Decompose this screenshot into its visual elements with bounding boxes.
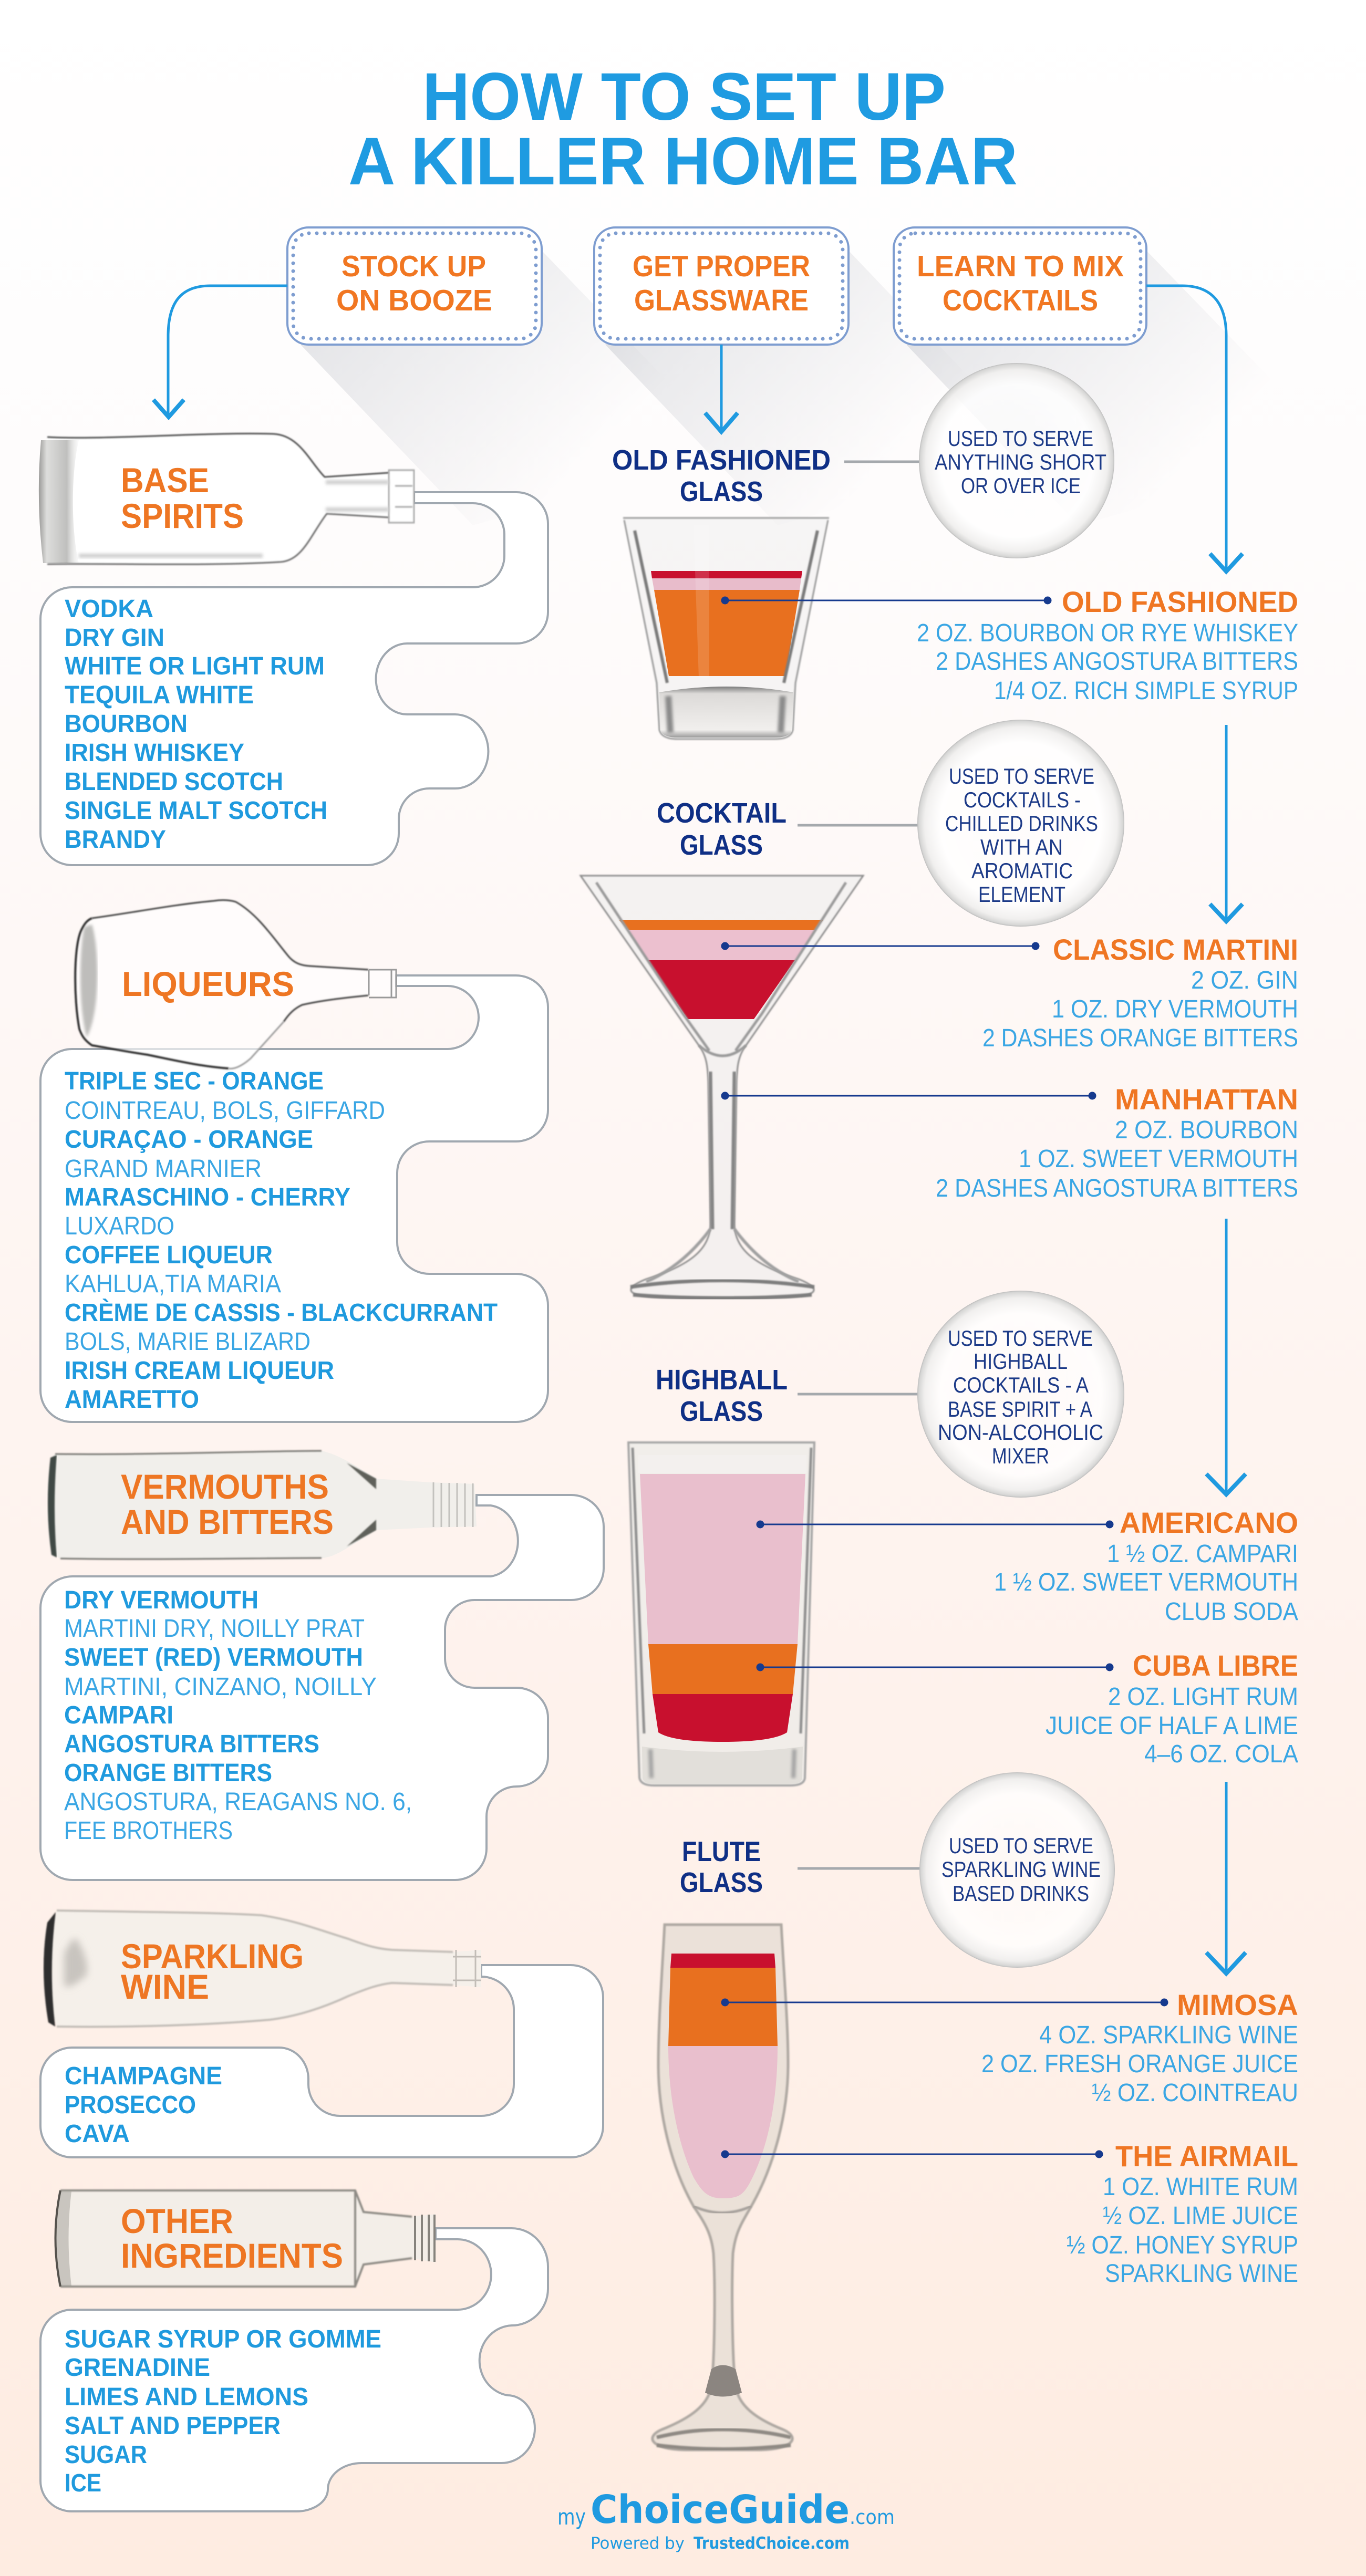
glass: flute	[653, 1925, 792, 2450]
heading: LIQUEURS	[122, 964, 294, 1003]
step box: learn to mix cocktails: LEARN TO MIX	[917, 250, 1124, 283]
recipe: the airmail: THE AIRMAIL	[1115, 2139, 1298, 2173]
heading: flute glass	[680, 1836, 763, 1898]
bubble: old fashioned usage: ANYTHING SHORT	[935, 450, 1106, 474]
logo: myChoiceGuide.com: Powered by	[591, 2534, 685, 2553]
heading: OTHER	[121, 2201, 233, 2240]
heading: highball glass	[656, 1364, 788, 1427]
heading	[121, 461, 244, 535]
list: ANGOSTURA, REAGANS NO. 6,	[64, 1788, 412, 1816]
bubble: highball usage: NON-ALCOHOLIC	[938, 1420, 1103, 1445]
step box: stock up on booze: STOCK UP	[341, 250, 486, 283]
bubble: highball usage: BASE SPIRIT + A	[948, 1397, 1092, 1421]
recipe: americano: CLUB SODA	[1165, 1598, 1298, 1626]
bubble: highball usage: USED TO SERVE	[948, 1326, 1093, 1351]
heading: BASE	[121, 461, 209, 500]
recipe: mimosa: 2 OZ. FRESH ORANGE JUICE	[981, 2050, 1298, 2078]
step box: stock up on booze	[287, 227, 542, 345]
bubble: flute usage: SPARKLING WINE	[941, 1857, 1101, 1882]
heading: VERMOUTHS	[121, 1467, 329, 1506]
bubble: old fashioned usage: USED TO SERVE	[948, 426, 1093, 451]
recipe: cuba libre: JUICE OF HALF A LIME	[1046, 1712, 1298, 1740]
logo: myChoiceGuide.com: .com	[850, 2506, 895, 2529]
connector: old fashioned label to bubble	[844, 460, 920, 463]
recipe: manhattan: 1 OZ. SWEET VERMOUTH	[1019, 1145, 1298, 1173]
ribbon outline	[40, 492, 548, 865]
step box: stock up on booze: ON BOOZE	[336, 284, 492, 317]
list: DRY GIN	[65, 624, 164, 652]
recipe: mimosa: ½ OZ. COINTREAU	[1092, 2079, 1298, 2107]
heading: AND BITTERS	[121, 1502, 334, 1541]
recipe: cuba libre: 2 OZ. LIGHT RUM	[1108, 1683, 1298, 1711]
connector: highball label to bubble	[798, 1393, 919, 1395]
panel: base spirits	[39, 433, 548, 865]
recipe: classic martini: 2 OZ. GIN	[1191, 967, 1298, 994]
bubble: highball usage	[917, 1291, 1124, 1498]
list: BOLS, MARIE BLIZARD	[65, 1328, 311, 1356]
diagonal box shadows	[301, 251, 1341, 525]
list	[64, 1586, 412, 1845]
recipe: the airmail: 1 OZ. WHITE RUM	[1103, 2173, 1298, 2201]
list: CAMPARI	[64, 1701, 173, 1729]
bubble: flute usage	[919, 1772, 1115, 1968]
leader: americano	[757, 1521, 1113, 1528]
heading: cocktail glass	[657, 797, 787, 861]
list: TRIPLE SEC - ORANGE	[65, 1067, 324, 1095]
step box: get proper glassware: GLASSWARE	[634, 284, 809, 317]
list: MARTINI, CINZANO, NOILLY	[64, 1673, 377, 1701]
leader: cuba libre	[757, 1664, 1113, 1671]
heading: old fashioned glass	[612, 444, 831, 507]
recipe: old fashioned: OLD FASHIONED	[1062, 585, 1298, 618]
connector: cocktail label to bubble	[798, 824, 919, 827]
list: COFFEE LIQUEUR	[65, 1241, 273, 1269]
bottle: liqueurs	[75, 900, 396, 1068]
list: FEE BROTHERS	[64, 1817, 233, 1845]
arrow: manhattan to americano	[1206, 1219, 1246, 1494]
bubble: old fashioned usage: OR OVER ICE	[961, 473, 1081, 498]
list: CRÈME DE CASSIS - BLACKCURRANT	[65, 1299, 498, 1327]
list: DRY VERMOUTH	[64, 1586, 258, 1614]
list: COINTREAU, BOLS, GIFFARD	[65, 1097, 385, 1125]
bubble: highball usage: MIXER	[992, 1443, 1049, 1468]
recipe: the airmail: SPARKLING WINE	[1105, 2260, 1298, 2288]
ribbon outline	[40, 2228, 548, 2511]
list: MARTINI DRY, NOILLY PRAT	[64, 1615, 365, 1643]
bubble: old fashioned usage	[919, 363, 1114, 558]
leader: mimosa	[721, 1999, 1168, 2006]
glass: highball	[628, 1442, 814, 1785]
list: SUGAR SYRUP OR GOMME	[65, 2325, 381, 2353]
bubble: cocktail usage: USED TO SERVE	[949, 764, 1094, 788]
ribbon outline	[40, 1495, 604, 1880]
bubble: cocktail usage: CHILLED DRINKS	[945, 811, 1098, 836]
bubble: cocktail usage: WITH AN	[980, 835, 1063, 859]
layered liquid	[668, 1954, 778, 2198]
list: SUGAR	[65, 2441, 147, 2469]
list: IRISH WHISKEY	[65, 739, 244, 767]
bottle: vermouth	[48, 1451, 477, 1559]
list: VODKA	[65, 595, 153, 623]
list: ICE	[65, 2469, 101, 2497]
recipe: mimosa	[981, 1988, 1298, 2107]
list: CAVA	[65, 2120, 130, 2148]
logo: myChoiceGuide.com: TrustedChoice.com	[694, 2534, 850, 2553]
recipe: americano: 1 ½ OZ. CAMPARI	[1107, 1540, 1298, 1568]
recipe: mimosa: 4 OZ. SPARKLING WINE	[1039, 2021, 1298, 2049]
heading: old fashioned glass: GLASS	[680, 476, 763, 507]
heading: flute glass: GLASS	[680, 1867, 763, 1898]
heading: WINE	[121, 1967, 209, 2006]
recipe: manhattan	[936, 1083, 1298, 1202]
heading: flute glass: FLUTE	[682, 1836, 761, 1867]
list: LUXARDO	[65, 1212, 174, 1240]
arrow: booze to base spirits	[153, 286, 287, 417]
layered liquid	[640, 1474, 805, 1742]
list	[65, 1067, 498, 1414]
step box: get proper glassware: GET PROPER	[633, 250, 810, 283]
panel: sparkling wine	[40, 1910, 603, 2157]
list: BOURBON	[65, 710, 188, 738]
bottle: other ingredients	[55, 2190, 436, 2287]
heading: old fashioned glass: OLD FASHIONED	[612, 444, 831, 476]
bubble: cocktail usage: AROMATIC	[971, 858, 1073, 883]
heading: cocktail glass: COCKTAIL	[657, 797, 787, 829]
list: KAHLUA,TIA MARIA	[65, 1270, 281, 1298]
list: MARASCHINO - CHERRY	[65, 1183, 350, 1211]
recipe: classic martini	[982, 933, 1298, 1052]
recipe: americano: AMERICANO	[1120, 1506, 1298, 1539]
list: IRISH CREAM LIQUEUR	[65, 1357, 334, 1385]
list	[65, 595, 327, 854]
list	[65, 2062, 222, 2148]
heading: highball glass: GLASS	[680, 1396, 763, 1427]
heading: SPIRITS	[121, 496, 244, 535]
recipe: old fashioned: 1/4 OZ. RICH SIMPLE SYRUP	[994, 677, 1298, 705]
bubble: highball usage: COCKTAILS - A	[953, 1373, 1089, 1397]
glass: old fashioned	[623, 518, 829, 739]
arrow: glassware to old fashioned glass	[705, 345, 738, 432]
title: HOW TO SET UP	[422, 59, 946, 134]
step box: learn to mix cocktails	[894, 227, 1146, 345]
list: LIMES AND LEMONS	[65, 2383, 308, 2411]
list: AMARETTO	[65, 1386, 199, 1414]
bubble: cocktail usage: ELEMENT	[978, 882, 1065, 907]
bubble: cocktail usage: COCKTAILS -	[964, 787, 1081, 812]
recipe: manhattan: 2 OZ. BOURBON	[1115, 1116, 1298, 1144]
recipe: the airmail	[1067, 2139, 1298, 2288]
title: A KILLER HOME BAR	[348, 124, 1018, 199]
recipe: manhattan: 2 DASHES ANGOSTURA BITTERS	[936, 1175, 1298, 1202]
recipe: old fashioned	[917, 585, 1298, 705]
panel: vermouths and bitters	[40, 1451, 604, 1880]
list: SWEET (RED) VERMOUTH	[64, 1644, 363, 1671]
logo: myChoiceGuide.com: ChoiceGuide	[591, 2487, 850, 2532]
bubble: highball usage: HIGHBALL	[974, 1349, 1068, 1374]
logo: myChoiceGuide.com	[557, 2487, 895, 2553]
recipe: americano	[994, 1506, 1298, 1626]
glass: cocktail	[581, 876, 863, 1299]
recipe: the airmail: ½ OZ. LIME JUICE	[1103, 2202, 1298, 2230]
leader: old fashioned	[721, 597, 1051, 604]
recipe: classic martini: 2 DASHES ORANGE BITTERS	[982, 1024, 1298, 1052]
list: PROSECCO	[65, 2091, 196, 2119]
list: CHAMPAGNE	[65, 2062, 222, 2090]
step box: get proper glassware	[594, 227, 848, 345]
arrow: old fashioned to classic martini	[1210, 725, 1243, 921]
list: BLENDED SCOTCH	[65, 768, 283, 796]
leader: classic martini	[721, 942, 1039, 950]
bubble: flute usage: BASED DRINKS	[953, 1881, 1089, 1906]
heading	[121, 1937, 304, 2006]
list: TEQUILA WHITE	[65, 681, 254, 709]
leader: manhattan	[721, 1092, 1096, 1099]
heading: INGREDIENTS	[121, 2236, 343, 2275]
heading: SPARKLING	[121, 1937, 304, 1976]
recipe: old fashioned: 2 DASHES ANGOSTURA BITTERS	[936, 648, 1298, 676]
bubble: flute usage: USED TO SERVE	[949, 1833, 1093, 1858]
bottle: base spirits	[39, 433, 414, 564]
heading: cocktail glass: GLASS	[680, 829, 763, 861]
leader: the airmail	[721, 2151, 1103, 2158]
list: ORANGE BITTERS	[64, 1759, 272, 1787]
list: CURAÇAO - ORANGE	[65, 1126, 313, 1154]
layered liquid	[619, 920, 823, 1019]
list: ANGOSTURA BITTERS	[64, 1730, 319, 1758]
panel: other ingredients	[40, 2190, 548, 2511]
title	[348, 59, 1018, 199]
logo: myChoiceGuide.com: my	[557, 2504, 586, 2530]
step box: learn to mix cocktails: COCKTAILS	[943, 284, 1098, 317]
ribbon outline	[40, 1965, 603, 2157]
recipe: mimosa: MIMOSA	[1177, 1988, 1298, 2021]
list: WHITE OR LIGHT RUM	[65, 652, 325, 680]
list: GRENADINE	[65, 2354, 210, 2382]
recipe: old fashioned: 2 OZ. BOURBON OR RYE WHISKEY	[917, 619, 1298, 647]
recipe: cuba libre: CUBA LIBRE	[1133, 1649, 1298, 1682]
panel: liqueurs	[40, 900, 548, 1422]
recipe: cuba libre: 4–6 OZ. COLA	[1144, 1740, 1298, 1768]
layered liquid	[651, 571, 802, 676]
recipe: cuba libre	[1046, 1649, 1298, 1768]
recipe: classic martini: CLASSIC MARTINI	[1053, 933, 1298, 966]
recipe: the airmail: ½ OZ. HONEY SYRUP	[1067, 2231, 1298, 2259]
recipe: classic martini: 1 OZ. DRY VERMOUTH	[1052, 995, 1298, 1023]
connector: flute label to bubble	[798, 1867, 921, 1870]
list: SINGLE MALT SCOTCH	[65, 797, 327, 825]
heading	[121, 2201, 343, 2275]
arrow: cocktails to old fashioned recipe	[1146, 286, 1243, 572]
bubble: cocktail usage	[917, 720, 1124, 927]
list: BRANDY	[65, 826, 166, 854]
arrow: cuba libre to mimosa	[1206, 1782, 1246, 1973]
list: GRAND MARNIER	[65, 1155, 262, 1183]
ribbon outline	[40, 975, 548, 1422]
list: SALT AND PEPPER	[65, 2412, 281, 2440]
recipe: manhattan: MANHATTAN	[1115, 1083, 1298, 1116]
heading	[121, 1467, 334, 1541]
recipe: americano: 1 ½ OZ. SWEET VERMOUTH	[994, 1569, 1298, 1596]
bottle: sparkling wine	[44, 1910, 481, 2027]
list	[65, 2325, 381, 2497]
heading: highball glass: HIGHBALL	[656, 1364, 788, 1396]
